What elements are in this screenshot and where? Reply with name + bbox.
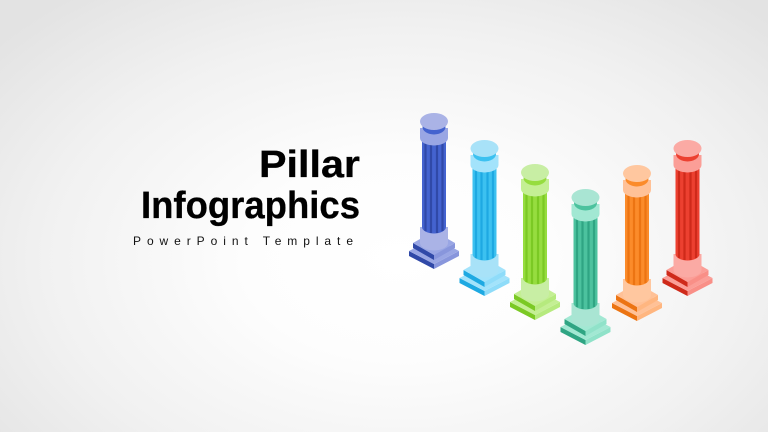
pillar: blue <box>409 113 459 269</box>
title: Infographics <box>141 185 360 227</box>
pillar: green <box>510 164 560 320</box>
title <box>141 144 360 227</box>
subtitle: PowerPoint Template <box>133 234 353 248</box>
pillar: teal <box>560 189 610 345</box>
pillar: sky blue <box>460 140 510 296</box>
title: Pillar <box>259 144 360 186</box>
pillar: orange <box>612 165 662 321</box>
pillar: red <box>662 140 712 296</box>
